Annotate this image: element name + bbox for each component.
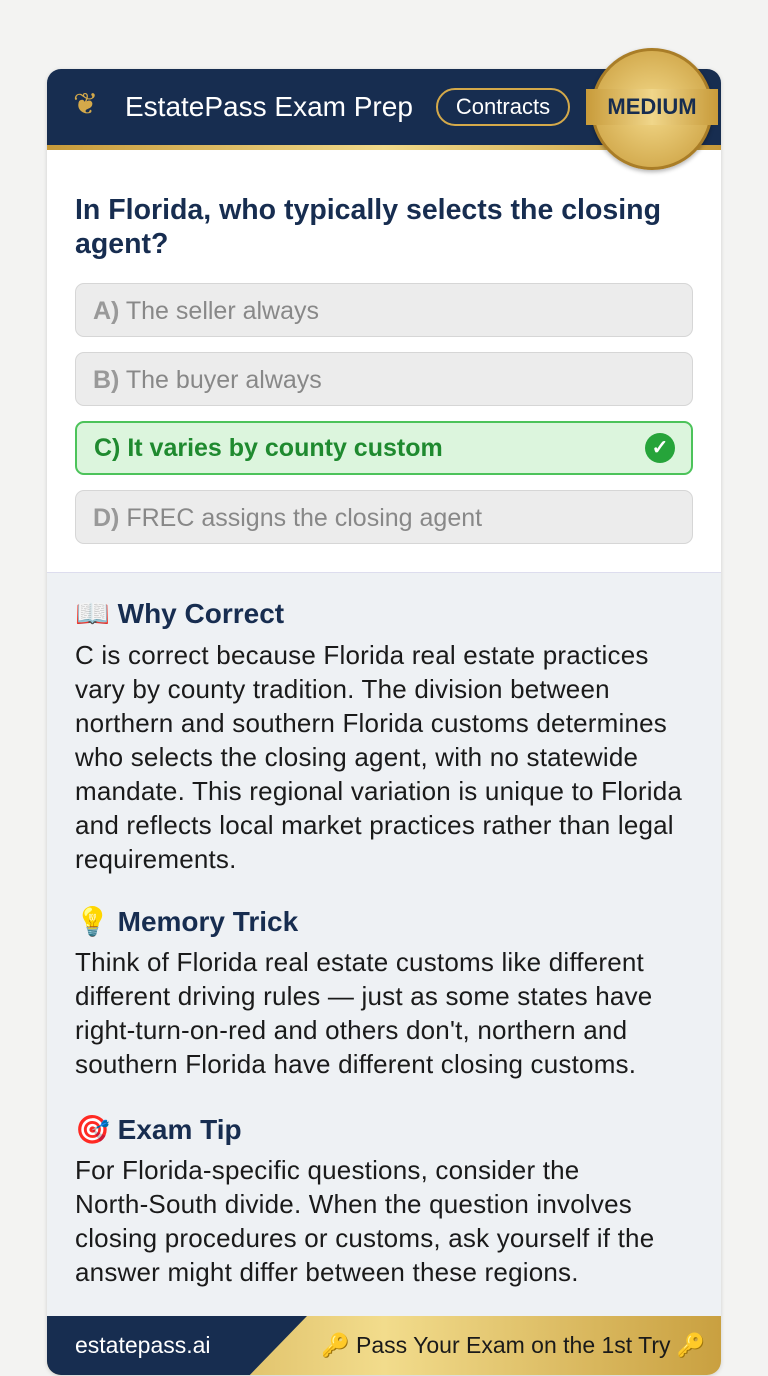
question: agent?: [75, 228, 168, 260]
text: memory trick: Think of Florida real estate customs like different: [75, 947, 644, 977]
text: memory trick: different driving rules — just as some states have: [75, 981, 652, 1011]
header bar: [47, 69, 721, 145]
footer url: estatepass.ai: [75, 1332, 211, 1358]
text: why correct: C is correct because Florida real estate practices: [75, 640, 649, 670]
brand title: EstatePass Exam Prep: [125, 91, 413, 122]
text: exam tip: closing procedures or customs, ask yourself if the: [75, 1223, 654, 1253]
category pill: Contracts: [456, 94, 550, 119]
text: memory trick: southern Florida have different closing customs.: [75, 1049, 636, 1079]
text: exam tip: answer might differ between these regions.: [75, 1257, 579, 1287]
option D: D) FREC assigns the closing agent: [93, 504, 482, 532]
option C correct: [75, 421, 693, 475]
category pill: [436, 88, 570, 126]
text: why correct: requirements.: [75, 844, 237, 874]
option D: [75, 490, 693, 544]
icon: check: [645, 433, 675, 463]
text: why correct: [75, 640, 682, 874]
option C correct: C) It varies by county custom: [94, 434, 443, 462]
text: exam tip: For Florida-specific questions, consider the: [75, 1155, 579, 1185]
heading: Memory Trick: 💡 Memory Trick: [75, 906, 298, 937]
icon: laurel: ❦: [73, 88, 98, 121]
heading: Exam Tip: 🎯 Exam Tip: [75, 1114, 242, 1145]
option B: B) The buyer always: [93, 366, 322, 394]
text: why correct: mandate. This regional variation is unique to Florida: [75, 776, 682, 806]
text: why correct: vary by county tradition. The division between: [75, 674, 610, 704]
text: exam tip: [75, 1155, 654, 1287]
text: why correct: northern and southern Florida customs determines: [75, 708, 667, 738]
footer: [47, 1316, 721, 1375]
text: why correct: and reflects local market practices rather than legal: [75, 810, 674, 840]
text: memory trick: right-turn-on-red and others don't, northern and: [75, 1015, 627, 1045]
question: In Florida, who typically selects the closing: [75, 194, 661, 226]
question: [75, 194, 661, 260]
difficulty badge: [591, 48, 713, 170]
difficulty badge: MEDIUM: [607, 94, 697, 119]
footer slogan: 🔑 Pass Your Exam on the 1st Try 🔑: [321, 1332, 706, 1358]
text: memory trick: [75, 947, 652, 1079]
option A: [75, 283, 693, 337]
text: exam tip: North-South divide. When the question involves: [75, 1189, 632, 1219]
option B: [75, 352, 693, 406]
option A: A) The seller always: [93, 297, 319, 325]
text: why correct: who selects the closing agent, with no statewide: [75, 742, 638, 772]
heading: Why Correct: 📖 Why Correct: [75, 598, 284, 629]
icon: check: ✓: [652, 437, 668, 459]
question area: [47, 150, 721, 573]
